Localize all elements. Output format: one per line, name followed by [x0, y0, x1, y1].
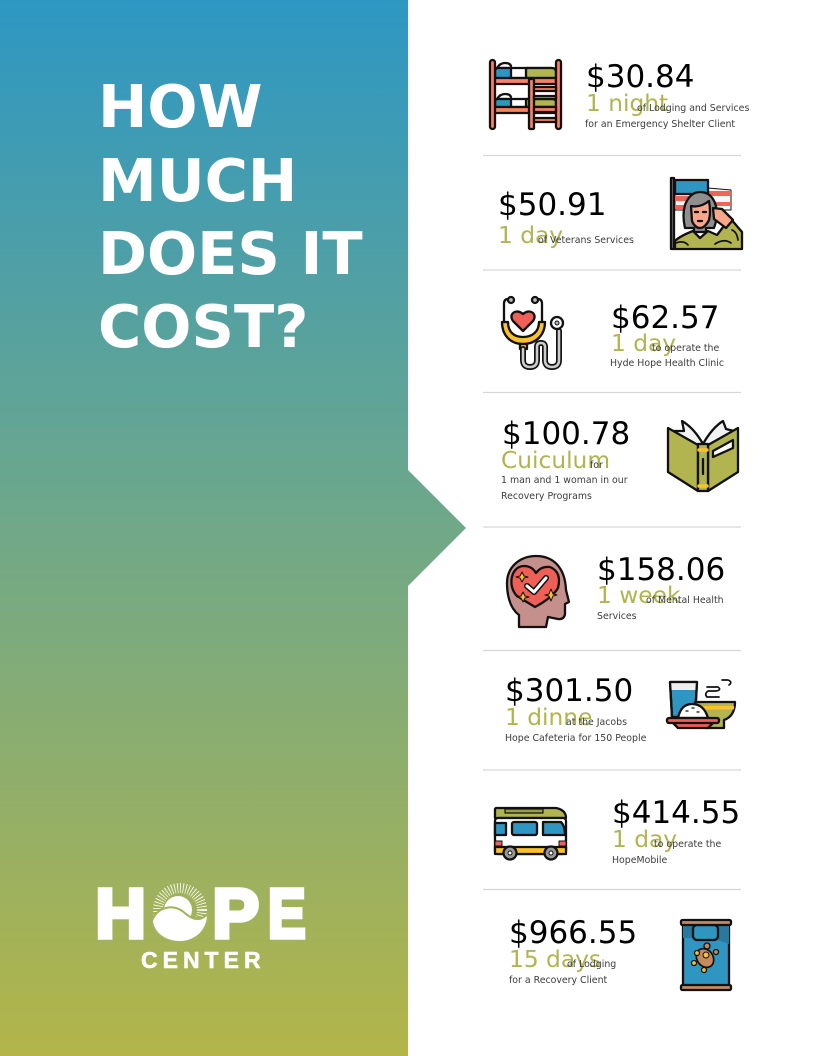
icon: stethoscope [502, 297, 563, 367]
description 1: for an Emergency Shelter Client [585, 119, 735, 130]
description 4: Recovery Programs [501, 491, 592, 502]
description 4: for [590, 460, 603, 471]
row 5: mental health [507, 552, 725, 627]
row 3: health clinic [502, 297, 724, 369]
icon: open book [668, 421, 738, 491]
icon: head with heart [507, 556, 569, 627]
description 3: to operate the [652, 343, 719, 354]
duration 8: 15 days [509, 946, 601, 973]
logo: Hope Center: P [212, 875, 259, 953]
row 6: dinner [505, 673, 735, 744]
description 2: of Veterans Services [538, 235, 634, 246]
duration 6: 1 dinne [505, 704, 592, 731]
description 8 [509, 959, 616, 986]
description 5 [597, 595, 724, 622]
duration 5: 1 week [597, 582, 681, 609]
row 4: curriculum [501, 416, 738, 502]
title: COST? [98, 292, 308, 361]
description 8: of Lodging [567, 959, 616, 970]
description 1: of Lodging and Services [637, 103, 749, 114]
row 1: emergency shelter [490, 59, 749, 130]
icon: bunk bed [490, 60, 561, 129]
icon: van [495, 808, 566, 860]
description 6: at the Jacobs [566, 717, 627, 728]
price 6: $301.50 [505, 673, 633, 709]
description 1 [585, 103, 749, 130]
title: HOW [98, 72, 263, 141]
logo: Hope Center: CENTER [141, 947, 266, 973]
duration 1: 1 night [586, 90, 668, 117]
price 2: $50.91 [498, 187, 606, 223]
panel: gradient sidebar with arrow [0, 0, 466, 1056]
description 4 [501, 460, 628, 502]
description 5: of Mental Health [646, 595, 724, 606]
price 7: $414.55 [612, 795, 740, 831]
description 7: to operate the [654, 839, 721, 850]
description 3: Hyde Hope Health Clinic [610, 358, 724, 369]
icon: bed with teddy bear [681, 920, 731, 990]
description 4: 1 man and 1 woman in our [501, 475, 628, 486]
logo: Hope Center [98, 883, 306, 968]
title: MUCH [98, 146, 297, 215]
description 7: HopeMobile [612, 855, 667, 866]
price 1: $30.84 [586, 59, 694, 95]
icon: saluting veteran [671, 178, 742, 249]
price 5: $158.06 [597, 552, 725, 588]
row 2: veterans [498, 178, 742, 249]
description 6 [505, 717, 647, 744]
duration 2: 1 day [498, 222, 563, 249]
description 5: Services [597, 611, 637, 622]
title: DOES IT [98, 219, 363, 288]
logo: Hope Center: H [95, 875, 146, 953]
duration 4: Cuiculum [501, 447, 610, 474]
title [98, 72, 363, 361]
icon: meal and water [667, 680, 735, 728]
logo: Hope Center: E [268, 875, 306, 953]
description 8: for a Recovery Client [509, 975, 608, 986]
duration 7: 1 day [612, 826, 677, 853]
price 4: $100.78 [502, 416, 630, 452]
duration 3: 1 day [611, 330, 676, 357]
description 7 [612, 839, 721, 866]
row 8: recovery lodging [509, 915, 731, 990]
description 3 [610, 343, 724, 369]
price 8: $966.55 [509, 915, 637, 951]
row 7: hopemobile [495, 795, 740, 866]
price 3: $62.57 [611, 300, 719, 336]
description 6: Hope Cafeteria for 150 People [505, 733, 647, 744]
